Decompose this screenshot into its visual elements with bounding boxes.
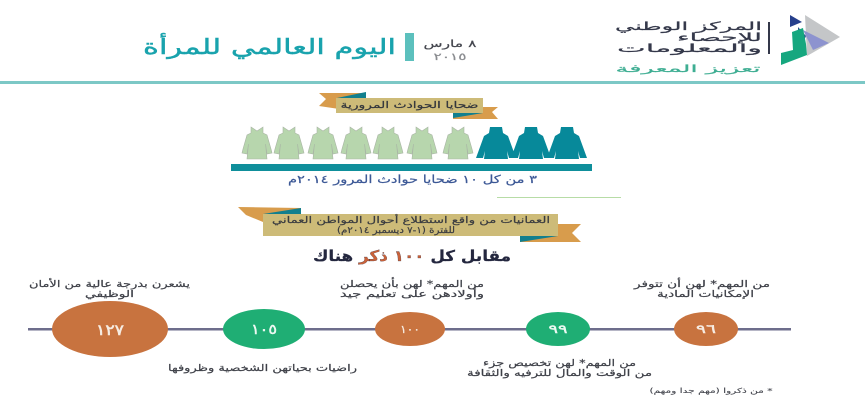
ribbon: traffic accident victims: ضحايا الحوادث المرورية: [340, 100, 478, 111]
date: ٨ مارس: [424, 39, 477, 50]
logo name: والمعلومات: [617, 41, 762, 56]
dark figures: [476, 127, 587, 159]
ribbon: traffic accident victims: [319, 92, 498, 119]
label: satisfied with life: راضيات بحياتهن الشخصية وظروفها: [168, 363, 358, 374]
pictogram base bar: [231, 164, 592, 171]
label: leisure time: [467, 358, 652, 379]
logo: [615, 15, 840, 75]
ribbon: survey of Omani women: للفترة (١-٧ ديسمبر ٢٠١٤م): [337, 226, 455, 236]
ribbon: survey of Omani women: [238, 207, 581, 242]
label: job security: يشعرن بدرجة عالية من الأمان: [29, 278, 190, 290]
logo name: للإحصاء: [677, 30, 762, 44]
node 96: [674, 312, 738, 346]
title accent bar: [405, 33, 414, 61]
node 96: ٩٦: [696, 322, 716, 336]
node 99: ٩٩: [548, 322, 568, 336]
header rule: [0, 81, 865, 84]
label: children's education: من المهم* لهن بأن يحصلن: [340, 277, 484, 290]
label: children's education: [340, 277, 484, 300]
section divider: [497, 197, 621, 198]
logo divider: [768, 22, 770, 54]
label: leisure time: من الوقت والمال للترفيه والثقافة: [467, 368, 652, 379]
node 99: [526, 312, 590, 346]
footnote: * من ذكروا (مهم جدا ومهم): [650, 387, 773, 395]
node 127: ١٢٧: [96, 321, 124, 339]
label: material means: الإمكانيات المادية: [657, 289, 754, 300]
title: اليوم العالمي للمرأة: [143, 33, 396, 59]
node 100: ١٠٠: [400, 323, 420, 336]
logo tagline: تعزيز المعرفة: [616, 64, 761, 75]
logo mark: [781, 15, 840, 65]
label: leisure time: من المهم* لهن تخصيص جزء: [483, 358, 636, 369]
pictogram: 10 women, 3 highlighted: [242, 127, 587, 159]
light figures: [242, 127, 473, 159]
logo name: المركز الوطني: [615, 19, 762, 34]
heading: for every 100 men: مقابل كل ١٠٠ ذكر هناك: [313, 247, 511, 265]
date: [424, 39, 477, 63]
label: material means: من المهم* لهن أن تتوفر: [633, 277, 770, 290]
ribbon: survey of Omani women: العمانيات من واقع استطلاع أحوال المواطن العماني: [272, 214, 550, 226]
label: job security: [29, 278, 190, 300]
node 105: ١٠٥: [251, 322, 277, 338]
pictogram caption: ٣ من كل ١٠ ضحايا حوادث المرور ٢٠١٤م: [288, 173, 537, 186]
label: material means: [633, 277, 770, 300]
node 105: [223, 309, 305, 349]
node 127: [52, 301, 168, 357]
label: job security: الوظيفي: [85, 289, 134, 300]
date: ٢٠١٥: [434, 52, 466, 63]
label: children's education: وأولادهن على تعليم جيد: [340, 287, 484, 300]
timeline axis: [28, 328, 791, 330]
logo name: [615, 19, 762, 56]
timeline: [28, 301, 791, 357]
node 100: [375, 312, 445, 346]
